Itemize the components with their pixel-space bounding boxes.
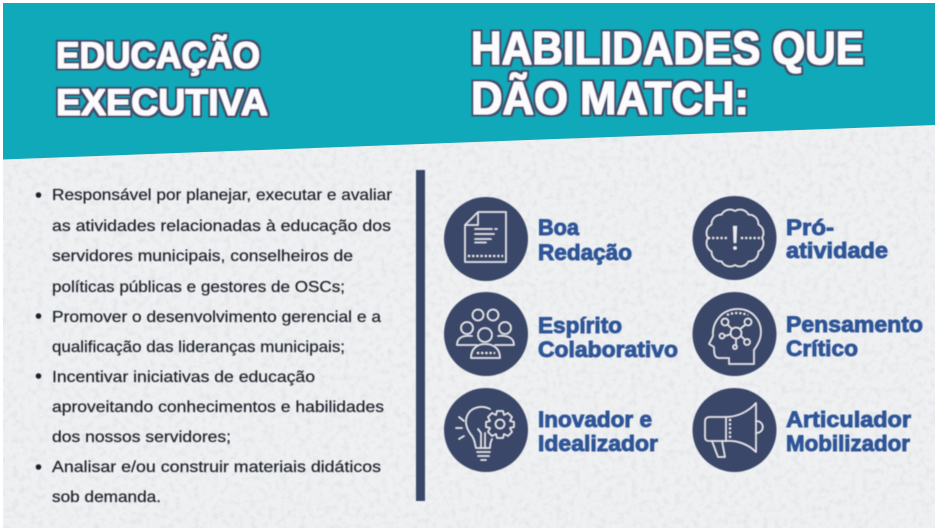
bullet list: responsibilities: dos nossos servidores;	[52, 429, 231, 446]
icon: team	[444, 292, 528, 376]
vertical divider bar	[416, 170, 425, 501]
bullet list: responsibilities: Incentivar iniciativas de educação	[52, 369, 315, 386]
skill: Boa Redação: Redação	[538, 240, 632, 265]
bullet list: responsibilities: as atividades relacionadas à educação dos	[52, 218, 391, 235]
skill: Inovador e Idealizador: Idealizador	[538, 431, 658, 456]
icon: exclamation cloud	[692, 196, 776, 280]
label: Boa	[538, 215, 580, 240]
bullet list: responsibilities: servidores municipais, conselheiros de	[52, 248, 353, 265]
skill: Pensamento Crítico: Crítico	[786, 336, 858, 361]
title: Educação Executiva: EXECUTIVA	[56, 82, 268, 123]
bullet list: responsibilities: aproveitando conhecimentos e habilidades	[52, 399, 384, 416]
skill: Pensamento Crítico	[692, 292, 923, 376]
title: Habilidades que dão match: HABILIDADES QUE	[471, 22, 864, 74]
bullet list: responsibilities	[36, 187, 393, 506]
skill: Pró-atividade: atividade	[786, 238, 888, 263]
icon: document	[444, 197, 528, 281]
skill: Boa Redação	[444, 197, 632, 281]
skill: Espírito Colaborativo	[444, 292, 678, 376]
bullet list: responsibilities: Responsável por planejar, executar e avaliar	[52, 187, 393, 204]
teal header band	[3, 3, 935, 160]
icon: light bulb with gear	[444, 388, 528, 472]
title: Educação Executiva: EDUCAÇÃO	[56, 34, 260, 76]
skill: Espírito Colaborativo: Colaborativo	[538, 337, 678, 362]
label: Pró-	[786, 215, 834, 240]
title: Educação Executiva	[56, 34, 268, 123]
bullet list: responsibilities: Analisar e/ou construir materiais didáticos	[52, 459, 381, 476]
bullet list: responsibilities: sob demanda.	[52, 489, 161, 506]
skill: Articulador Mobilizador: Mobilizador	[786, 431, 910, 456]
title: Habilidades que dão match: DÃO MATCH:	[471, 72, 749, 124]
bullet list: responsibilities: qualificação das lideranças municipais;	[52, 339, 345, 356]
bullet list: responsibilities: políticas públicas e gestores de OSCs;	[52, 279, 345, 296]
skill: Articulador Mobilizador	[692, 388, 911, 472]
label: Articulador	[786, 407, 911, 432]
skill: Inovador e Idealizador	[444, 388, 658, 472]
bullet list: responsibilities: Promover o desenvolvimento gerencial e a	[52, 309, 381, 326]
icon: head with network	[692, 292, 776, 376]
label: Espírito	[538, 313, 622, 338]
label: Inovador e	[538, 407, 652, 432]
label: Pensamento	[786, 312, 923, 337]
skill: Pró-atividade	[692, 196, 888, 280]
icon: megaphone	[692, 388, 776, 472]
title: Habilidades que dão match	[471, 22, 864, 124]
